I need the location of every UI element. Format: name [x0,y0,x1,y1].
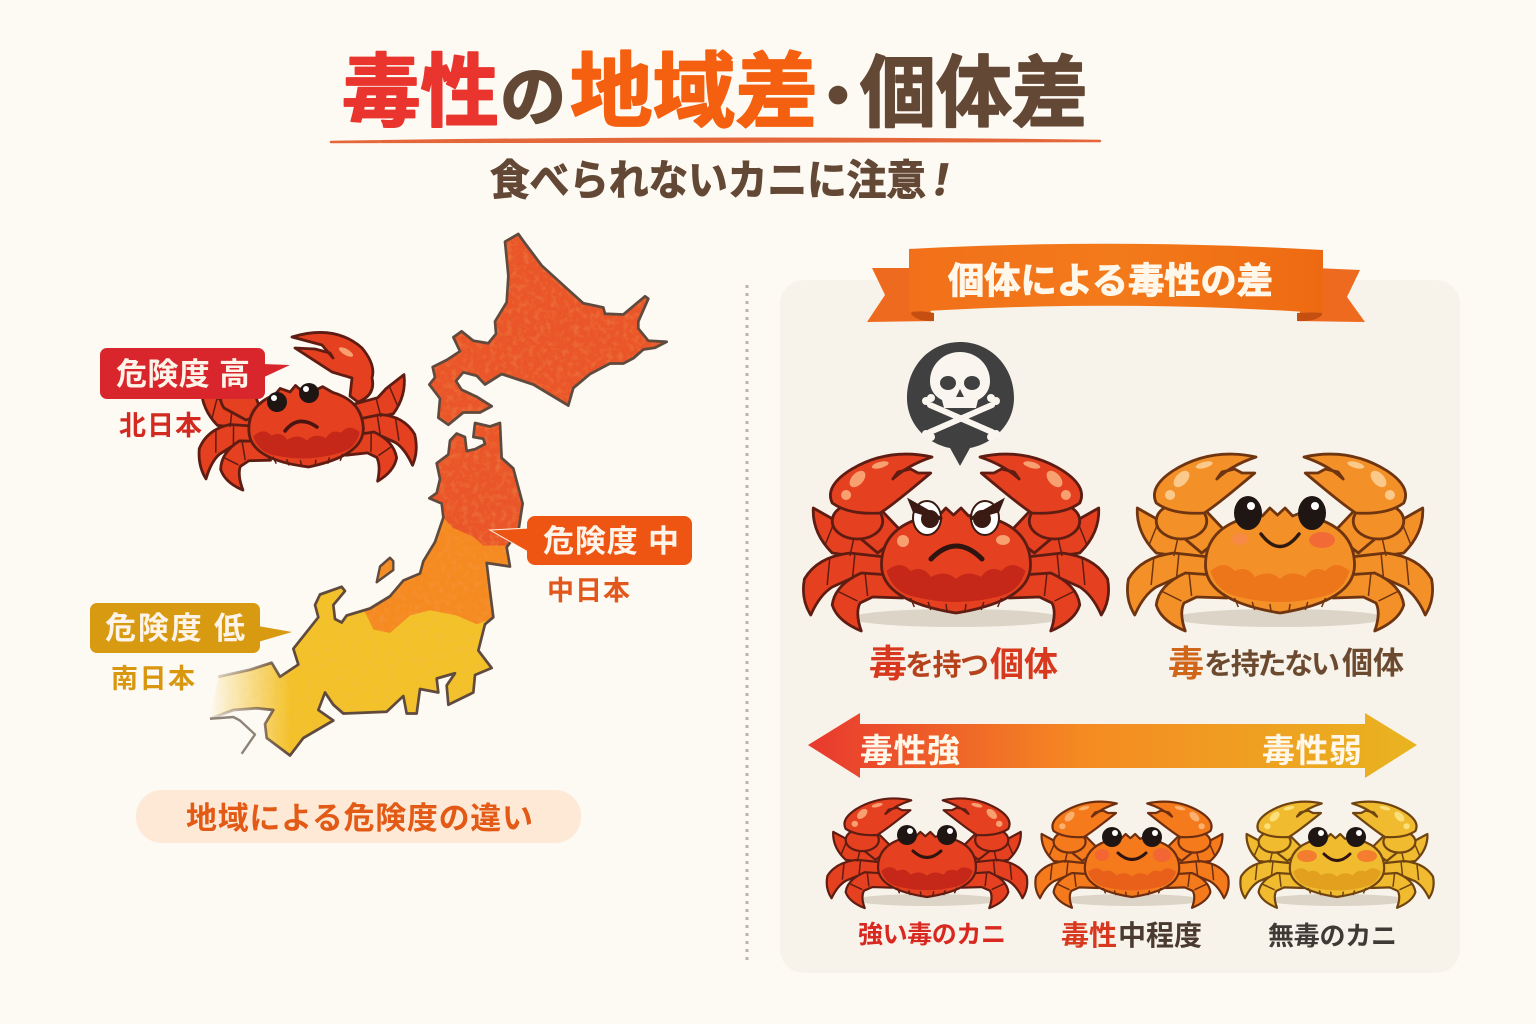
arrow label: weak: 毒性弱 [1262,732,1362,769]
callout: low risk [90,603,292,653]
callout: medium risk [490,516,692,565]
region: central Japan: 中日本 [547,576,630,606]
caption pill: 地域による危険度の違い [186,801,533,836]
eyes [1234,496,1326,530]
panel background [780,280,1460,973]
crab legs [194,374,419,493]
smile [913,851,941,858]
Sado outline [377,558,393,582]
Honshu red zone [432,425,522,546]
callout text: 危険度 低 [105,611,245,646]
ribbon heading [867,244,1365,322]
frown [931,546,982,559]
crab body [803,454,1109,631]
angry eyes [910,501,1002,535]
Honshu outline [210,423,523,756]
label: strong poison crab: 強い毒のカニ [858,921,1006,949]
shadow [1267,894,1407,906]
crab mouth [285,421,317,431]
crab eyes [267,383,319,412]
label: poisonous individual: を持つ [905,649,989,682]
region: northern Japan: 北日本 [119,411,202,441]
crab right claw [292,332,373,402]
callout box [100,348,265,399]
subtitle: ！ [916,157,967,204]
crab: strongly poisonous small [827,798,1027,908]
ribbon right tail [1297,268,1365,322]
title [342,47,1088,138]
Honshu orange zone [364,518,508,633]
label: non-poisonous individual: 個体 [1342,646,1404,681]
callout text: 危険度 中 [543,524,679,559]
label: non-poisonous individual [1168,643,1404,684]
cheeks [1297,850,1377,862]
map of Japan [203,234,667,763]
shadow [855,894,999,906]
skull eyes [940,376,980,397]
callout tail [490,528,530,553]
crab body [1035,802,1229,908]
shadow [1062,894,1202,906]
smile [1261,534,1299,546]
panel: individual differences [780,244,1460,973]
crab: northern Japan [194,332,419,493]
label: non-poisonous individual: を持たない [1204,648,1340,681]
ribbon left tail [867,268,934,322]
title: 地域差 [570,47,818,138]
callout tail [262,364,290,378]
arrow: toxicity scale [808,713,1417,778]
eyes [897,825,957,845]
Hokkaido [429,234,667,425]
callout box [527,516,692,565]
crossbones [922,394,1000,441]
callout box [90,603,260,653]
crab: poisonous [803,454,1109,631]
ribbon band [909,244,1323,313]
label: non-toxic crab: 無毒のカニ [1268,921,1397,951]
crab body [1127,454,1433,631]
title underline [331,139,1100,142]
shell highlights [897,535,1010,547]
title: 個体差 [860,49,1088,137]
smile [1324,854,1350,860]
label: poisonous individual: 個体 [990,646,1058,684]
callout text: 危険度 高 [116,357,250,392]
ribbon left fold [911,310,934,321]
Shikoku fragment [210,717,255,754]
Sado island [377,558,393,582]
callout tail [258,626,292,642]
Honshu yellow zone [212,588,490,754]
crab left claw arm [220,388,262,420]
icon: skull warning pin [907,342,1014,466]
label: non-poisonous individual: 毒 [1168,643,1204,684]
Hokkaido outline [429,234,667,425]
subtitle: 食べられないカニに注意 [490,157,926,204]
cheeks [1232,532,1335,548]
label: poisonous individual: 毒 [869,644,907,686]
arrow label: strong: 毒性強 [860,732,960,769]
skull head [930,352,990,408]
title: ・ [805,60,871,134]
smile [1118,853,1146,860]
label: moderate toxicity [1061,920,1202,951]
crab: non-poisonous [1127,454,1433,631]
eyes [1102,827,1162,847]
cheeks [1095,848,1171,862]
panel: regional map [90,234,692,843]
crab: non-toxic small [1240,802,1434,908]
shadow [1175,609,1385,627]
crab arm highlight [338,345,354,359]
region: southern Japan: 南日本 [111,664,195,694]
shadow [851,609,1061,627]
title: 毒性 [342,48,499,137]
crab body [827,798,1027,908]
label: poisonous individual [869,644,1058,686]
eyes [1308,827,1366,847]
label: moderate toxicity: 毒性 [1061,920,1117,951]
caption pill [136,790,581,843]
title: の [500,60,566,134]
crab: moderately poisonous small [1035,802,1229,908]
ribbon text: 個体による毒性の差 [948,260,1273,301]
crab body [1240,802,1434,908]
callout: high risk [100,348,290,399]
label: moderate toxicity: 中程度 [1118,920,1202,951]
ribbon right fold [1297,312,1322,321]
crab shell [246,383,366,469]
